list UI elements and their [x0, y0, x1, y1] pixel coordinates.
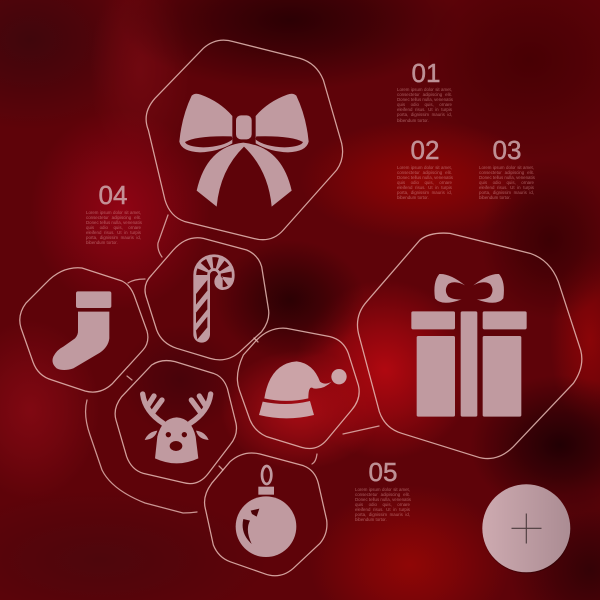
text block 04: Donec tellus nulla, venenatis: [86, 220, 142, 225]
panel: candy cane hexagon: [145, 238, 269, 360]
text block 03: bibendum tortor.: [479, 195, 511, 200]
text block 01: porta, dignissim mauris id,: [397, 112, 452, 117]
text block 01: bibendum tortor.: [397, 118, 429, 123]
text block 02: eleifend risus. Ut in turpis: [397, 185, 452, 190]
number 02: 02: [411, 135, 439, 165]
text block 05: consectetur adipiscing elit.: [355, 492, 410, 497]
text block 05: quis odio quis, ornare: [355, 502, 410, 507]
text block 04: quis odio quis, ornare: [86, 225, 141, 230]
icon: reindeer: [143, 394, 211, 463]
panel: bow hexagon: [146, 40, 343, 240]
text block 04: consectetur adipiscing elit.: [86, 215, 141, 220]
text block 04: porta, dignissim mauris id,: [86, 235, 141, 240]
text block 03: Donec tellus nulla, venenatis: [479, 175, 535, 180]
text block 01: [397, 87, 453, 123]
text block 02: Lorem ipsum dolor sit amet,: [397, 164, 452, 170]
icon: bow: [179, 94, 309, 207]
plus button: [482, 484, 570, 574]
text block 04: eleifend risus. Ut in turpis: [86, 230, 141, 235]
text block 03: quis odio quis, ornare: [479, 180, 534, 185]
number 03: 03: [493, 135, 521, 165]
number 04: 04: [99, 180, 127, 210]
text block 02: porta, dignissim mauris id,: [397, 190, 452, 195]
text block 02: bibendum tortor.: [397, 195, 429, 200]
text block 03: [479, 164, 535, 200]
number 05: 05: [369, 457, 397, 487]
text block 02: consectetur adipiscing elit.: [397, 170, 452, 175]
text block 05: porta, dignissim mauris id,: [355, 512, 410, 517]
panel: reindeer hexagon: [115, 361, 237, 484]
text block 02: Donec tellus nulla, venenatis: [397, 175, 453, 180]
text block 01: consectetur adipiscing elit.: [397, 92, 452, 97]
icon: gift box: [411, 274, 527, 417]
text block 05: eleifend risus. Ut in turpis: [355, 507, 410, 512]
text block 01: eleifend risus. Ut in turpis: [397, 107, 452, 112]
text block 03: consectetur adipiscing elit.: [479, 170, 534, 175]
icon: ornament: [236, 466, 296, 557]
text block 05: Donec tellus nulla, venenatis: [355, 497, 411, 502]
panel: gift hexagon: [357, 233, 582, 459]
connector lines: [86, 215, 379, 513]
text block 01: Lorem ipsum dolor sit amet,: [397, 87, 452, 92]
text block 05: Lorem ipsum dolor sit amet,: [355, 486, 410, 492]
text block 03: porta, dignissim mauris id,: [479, 190, 534, 195]
panel: ornament hexagon: [205, 453, 327, 576]
text block 01: quis odio quis, ornare: [397, 102, 452, 107]
number 01: 01: [412, 58, 440, 88]
icon: santa hat: [259, 361, 347, 418]
icon: candy cane: [196, 263, 226, 339]
panel: stocking hexagon: [20, 268, 148, 392]
text block 04: [86, 210, 142, 245]
text block 05: bibendum tortor.: [355, 517, 387, 522]
icon: stocking: [53, 291, 111, 370]
panel: santa hat hexagon: [237, 328, 359, 449]
text block 05: [355, 486, 411, 522]
text block 04: Lorem ipsum dolor sit amet,: [86, 210, 141, 214]
text block 02: quis odio quis, ornare: [397, 180, 452, 185]
text block 04: bibendum tortor.: [86, 240, 118, 245]
text block 01: Donec tellus nulla, venenatis: [397, 97, 453, 102]
text block 03: Lorem ipsum dolor sit amet,: [479, 164, 534, 170]
text block 03: eleifend risus. Ut in turpis: [479, 185, 534, 190]
text block 02: [397, 164, 453, 200]
